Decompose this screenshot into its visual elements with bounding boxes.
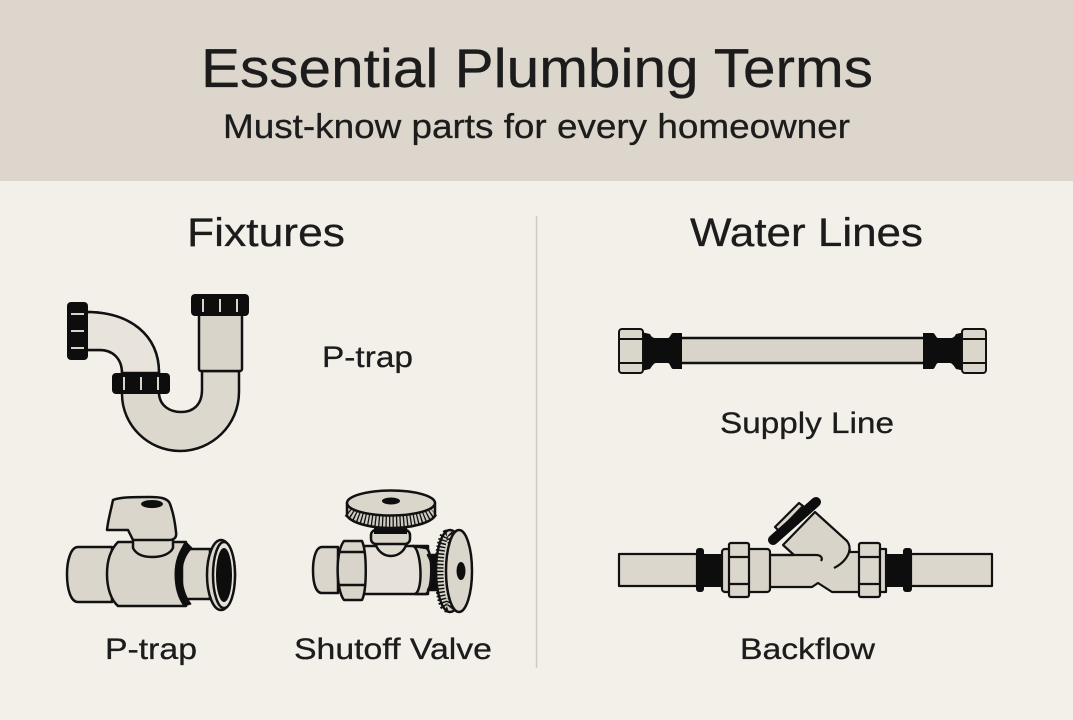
icon: ball valve <box>67 497 235 610</box>
title: Essential Plumbing Terms <box>201 37 873 99</box>
label: P-trap top: P-trap <box>322 341 413 374</box>
label: Backflow: Backflow <box>740 633 875 666</box>
header band <box>0 0 1073 181</box>
label: Shutoff Valve: Shutoff Valve <box>294 633 492 666</box>
heading: Fixtures: Fixtures <box>187 211 345 255</box>
subtitle: Must-know parts for every homeowner <box>223 108 850 146</box>
icon: supply line <box>619 329 986 373</box>
label: P-trap bottom: P-trap <box>105 633 197 666</box>
heading: Water Lines: Water Lines <box>690 211 923 255</box>
icon: backflow valve <box>619 502 992 597</box>
icon: shutoff valve <box>313 490 472 612</box>
label: Supply Line: Supply Line <box>720 407 894 440</box>
icon: P-trap pipe <box>67 294 249 451</box>
